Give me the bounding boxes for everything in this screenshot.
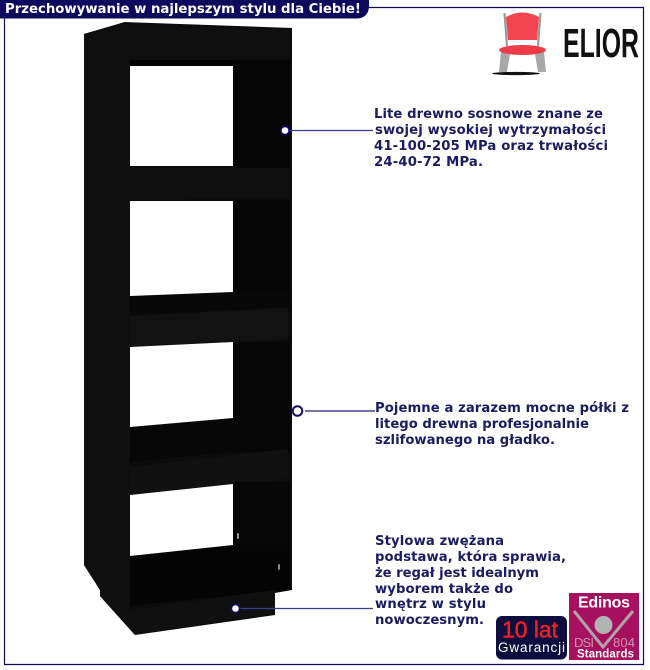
text: tapered base: Stylowa zwężana: [375, 534, 504, 549]
badge: 10-year warranty: 10 lat: [502, 616, 559, 642]
icon: red chair: [492, 12, 546, 75]
marker: tapered base: [231, 604, 373, 613]
text: wood strength: [374, 107, 608, 170]
text: tapered base: [375, 534, 566, 628]
text: tapered base: wnętrz w stylu: [375, 597, 486, 612]
text: wood strength: Lite drewno sosnowe znane ze: [374, 107, 603, 122]
bookshelf product photo: [84, 22, 292, 635]
badge: 10-year warranty: Gwarancji: [498, 640, 565, 655]
badge: Edinos DSI 804 standards: Standards: [577, 648, 634, 660]
badge: Edinos DSI 804 standards: [569, 593, 639, 660]
marker: wood strength: [281, 126, 373, 135]
logo: Elior chair: [492, 12, 639, 75]
header banner: Przechowywanie w najlepszym stylu dla Ciebie!: [5, 2, 361, 17]
callout: wood strength: [281, 107, 608, 170]
badge: Edinos DSI 804 standards: DSI: [574, 635, 594, 650]
text: tapered base: nowoczesnym.: [375, 613, 484, 628]
callout: shelves: [293, 400, 629, 448]
text: shelves: litego drewna profesjonalnie: [375, 417, 589, 432]
marker: shelves: [293, 406, 375, 416]
text: wood strength: 24-40-72 MPa.: [374, 155, 483, 170]
text: tapered base: wyborem także do: [375, 582, 513, 597]
badge: Edinos DSI 804 standards: 804: [613, 635, 635, 650]
badge: 10-year warranty: [496, 616, 567, 660]
shelf openings: [130, 66, 233, 556]
text: shelves: [375, 400, 629, 448]
text: tapered base: że regał jest idealnym: [375, 566, 539, 581]
badge: Edinos DSI 804 standards: Edinos: [578, 594, 630, 612]
text: wood strength: swojej wysokiej wytrzymałości: [375, 122, 606, 138]
text: tapered base: podstawa, która sprawia,: [375, 549, 566, 565]
text: wood strength: 41-100-205 MPa oraz trwałości: [374, 138, 608, 154]
callout: tapered base: [231, 534, 566, 628]
text: shelves: Pojemne a zarazem mocne półki z: [375, 400, 629, 416]
text: shelves: szlifowanego na gładko.: [375, 433, 555, 448]
